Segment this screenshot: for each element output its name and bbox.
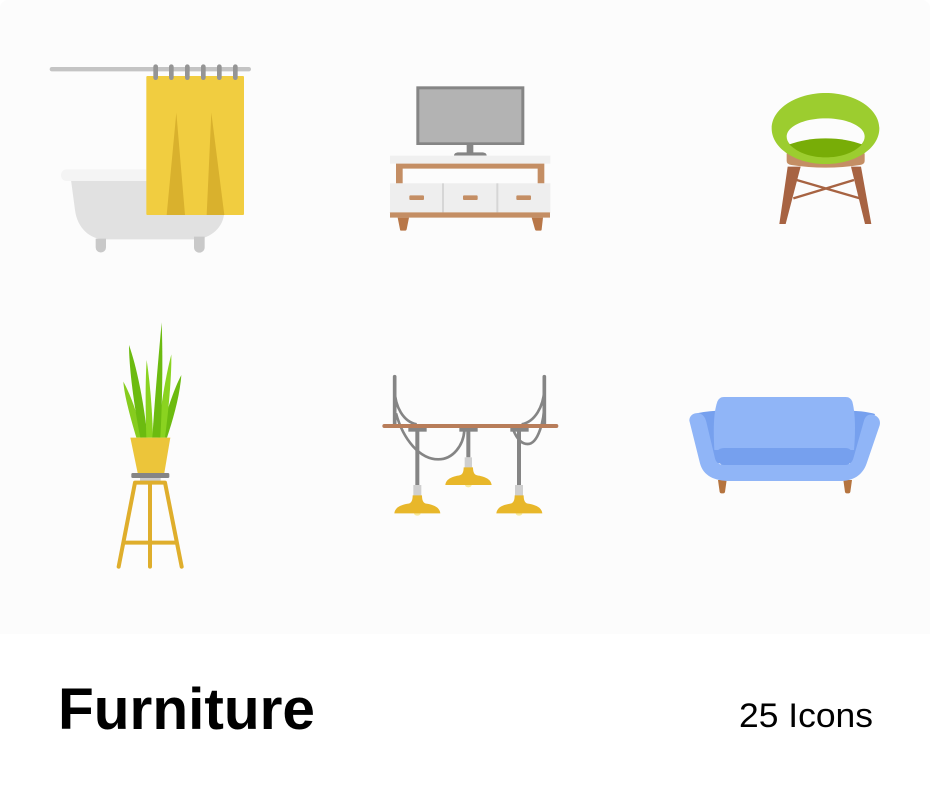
icon: hanging pendant lamps <box>382 377 558 516</box>
lamp three <box>496 485 542 516</box>
leaf far right <box>160 375 181 438</box>
leaf tall <box>152 322 162 438</box>
icon: green round chair <box>772 93 879 224</box>
leaf middle small <box>146 360 153 438</box>
icon: bathtub with shower curtain <box>50 64 251 253</box>
leaf right <box>158 354 171 438</box>
icon: TV on media console <box>390 86 550 231</box>
leaf left <box>129 345 148 438</box>
lamp one <box>394 485 440 516</box>
title: Furniture <box>58 677 315 742</box>
icon count label: 25 Icons <box>739 697 873 735</box>
icon: potted plant on stool <box>119 322 182 567</box>
lamp two <box>445 457 492 487</box>
leaf far left <box>123 382 142 438</box>
icon: blue sofa <box>689 397 880 493</box>
